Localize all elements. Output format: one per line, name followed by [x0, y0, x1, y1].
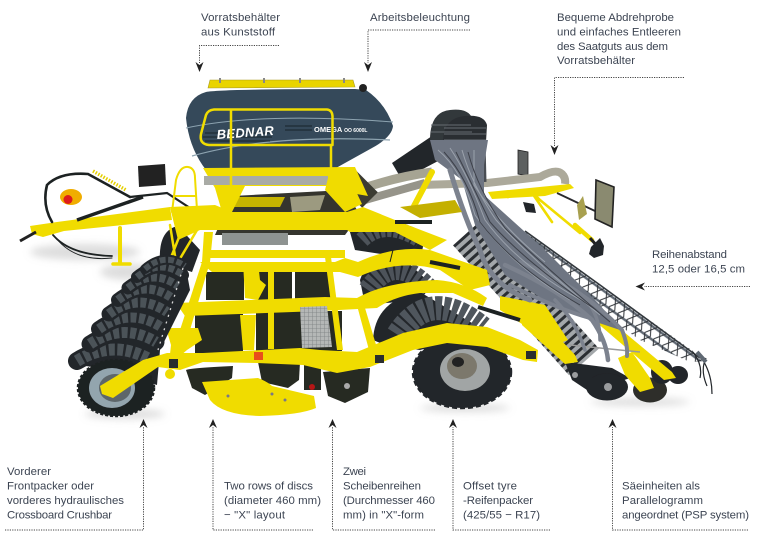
callout: Arbeitsbeleuchtung	[364, 12, 470, 72]
callout: Abdrehprobe	[550, 12, 684, 155]
callout: Two rows of discs: (diameter 460 mm)	[224, 495, 321, 507]
callout: Säeinheiten: angeordnet (PSP system)	[622, 510, 749, 522]
rear seed units	[500, 296, 688, 402]
callout: Two rows of discs	[209, 419, 321, 530]
seeding machine illustration	[20, 78, 712, 419]
rear marker arm assembly	[420, 150, 614, 258]
callout: Vorratsbehälter: aus Kunststoff	[201, 26, 276, 38]
seed coulter ladder	[468, 232, 584, 362]
callout: Frontpacker: Frontpacker oder	[7, 480, 94, 492]
hopper: Vorratsbehälter	[186, 78, 393, 212]
callout: Zwei Scheibenreihen: mm) in "X"-form	[343, 510, 424, 522]
callout: Reihenabstand: 12,5 oder 16,5 cm	[652, 264, 745, 276]
callout: Arbeitsbeleuchtung: Arbeitsbeleuchtung	[370, 12, 470, 24]
callout: Reihenabstand	[636, 249, 750, 290]
central dark machinery	[160, 190, 360, 272]
hopper lid	[208, 80, 355, 88]
callout: Säeinheiten: Säeinheiten als	[622, 480, 700, 492]
spring tine harrow	[525, 231, 712, 394]
callout: Offset tyre: -Reifenpacker	[463, 495, 533, 507]
callout: Zwei Scheibenreihen: Zwei	[343, 466, 366, 478]
callout: Vorratsbehälter	[196, 12, 280, 72]
marker plate	[595, 180, 614, 227]
hopper: Vorratsbehälter: OMEGA OO 6000L	[314, 125, 368, 134]
callout: Vorratsbehälter: Vorratsbehälter	[201, 12, 280, 24]
disc rows	[186, 270, 370, 403]
callout: Reihenabstand: Reihenabstand	[652, 249, 727, 261]
lamp	[359, 84, 367, 92]
front wheel	[78, 360, 154, 416]
callout: Zwei Scheibenreihen: Scheibenreihen	[343, 480, 421, 492]
railing	[201, 110, 332, 193]
callout: Offset tyre	[449, 419, 550, 530]
offset tyre	[413, 336, 511, 408]
main yellow frame	[166, 168, 490, 356]
callout: Offset tyre: (425/55 − R17)	[463, 510, 540, 522]
callout: Abdrehprobe: Vorratsbehälter	[557, 55, 635, 67]
hopper base frame	[203, 167, 368, 212]
yellow rear struts and pipes	[345, 172, 462, 218]
callout: Two rows of discs: − "X" layout	[224, 510, 286, 522]
marker disc	[589, 238, 604, 258]
callout: Frontpacker: Crossboard Crushbar	[7, 510, 112, 522]
callout: Zwei Scheibenreihen: (Durchmesser 460	[343, 495, 435, 507]
callout: Säeinheiten	[608, 419, 749, 530]
packer chain	[158, 268, 183, 350]
callout: Frontpacker: vorderes hydraulisches	[7, 495, 124, 507]
hydraulic cylinders	[395, 222, 520, 320]
step ladder	[172, 167, 197, 212]
ground shadow	[30, 244, 690, 419]
icon: red reflector	[60, 189, 82, 205]
brand logo: BEDNAR	[216, 123, 275, 142]
callout: Two rows of discs: Two rows of discs	[224, 480, 313, 492]
rear tyres with chevron tread	[348, 217, 487, 350]
box light	[138, 164, 166, 187]
callout: Zwei Scheibenreihen	[328, 419, 435, 530]
front shield plate	[202, 378, 316, 416]
callout: Säeinheiten: Parallelogramm	[622, 495, 703, 507]
seed distribution heads and hoses	[392, 110, 627, 360]
callout: Frontpacker: Vorderer	[7, 466, 51, 478]
callout: Offset tyre: Offset tyre	[463, 480, 517, 492]
callout: Abdrehprobe: des Saatguts aus dem	[557, 41, 668, 53]
callout: Abdrehprobe: Bequeme Abdrehprobe	[557, 12, 674, 24]
drawbar, hoses and lights	[20, 164, 197, 264]
support foot	[165, 369, 175, 379]
main yellow beam and front arm	[100, 222, 538, 416]
callout: Abdrehprobe: und einfaches Entleeren	[557, 26, 681, 38]
front packer roller	[77, 260, 190, 416]
callout: Frontpacker	[5, 419, 148, 530]
walkway grid	[300, 306, 332, 348]
